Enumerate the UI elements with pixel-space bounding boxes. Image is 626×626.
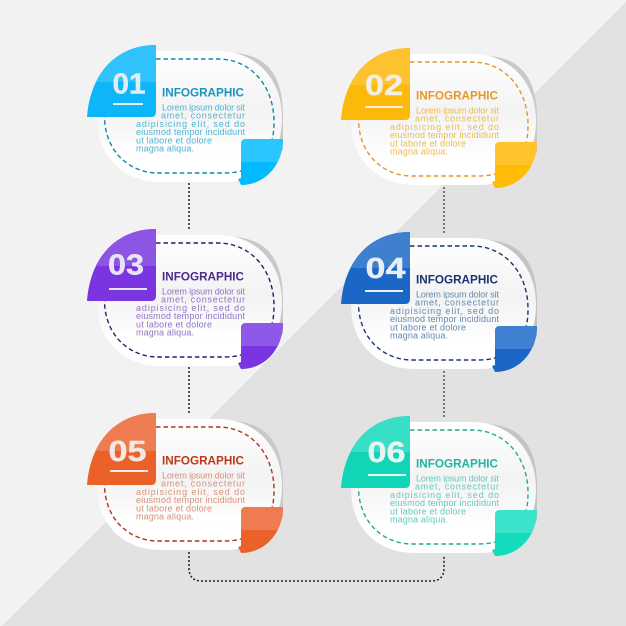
dashed outline bbox=[104, 243, 274, 357]
card 02 bbox=[339, 46, 539, 188]
body text: Lorem ipsum dolor sit bbox=[416, 106, 499, 116]
body text: amet, consectetur bbox=[415, 114, 499, 124]
number tab bbox=[85, 411, 158, 485]
body text: amet, consectetur bbox=[161, 295, 245, 305]
body text: ut labore et dolore bbox=[390, 138, 466, 148]
body text: magna aliqua. bbox=[136, 512, 194, 522]
card 05 bbox=[85, 411, 285, 553]
number tab bbox=[339, 46, 412, 120]
corner fold bbox=[238, 323, 283, 369]
body text bbox=[390, 474, 499, 524]
card 04 bbox=[339, 230, 539, 372]
body text: eiusmod tempor incididunt bbox=[136, 127, 245, 137]
card shadow bbox=[232, 53, 283, 150]
corner fold bbox=[238, 507, 283, 553]
body text: ut labore et dolore bbox=[390, 322, 466, 332]
body text: adipisicing elit, sed do bbox=[390, 490, 499, 500]
body text: Lorem ipsum dolor sit bbox=[162, 102, 245, 112]
corner fold bbox=[492, 510, 537, 556]
heading: INFOGRAPHIC bbox=[416, 274, 498, 286]
body text: adipisicing elit, sed do bbox=[136, 119, 245, 129]
card shadow bbox=[232, 421, 283, 518]
heading: INFOGRAPHIC bbox=[416, 458, 498, 470]
number tab bbox=[339, 230, 412, 304]
body text: adipisicing elit, sed do bbox=[136, 487, 245, 497]
body text: Lorem ipsum dolor sit bbox=[416, 474, 499, 484]
body text: eiusmod tempor incididunt bbox=[390, 314, 499, 324]
body text: amet, consectetur bbox=[415, 298, 499, 308]
body text: eiusmod tempor incididunt bbox=[390, 130, 499, 140]
corner fold bbox=[492, 326, 537, 372]
heading: INFOGRAPHIC bbox=[162, 88, 244, 100]
body text: magna aliqua. bbox=[390, 330, 448, 340]
card body bbox=[351, 422, 536, 553]
number: 05 bbox=[108, 436, 146, 468]
card 01 bbox=[85, 43, 285, 185]
number: 06 bbox=[368, 437, 406, 469]
card shadow bbox=[232, 237, 283, 334]
dashed outline bbox=[358, 430, 528, 544]
card body bbox=[97, 419, 282, 550]
body text: Lorem ipsum dolor sit bbox=[416, 290, 499, 300]
card shadow bbox=[486, 424, 537, 521]
body text: amet, consectetur bbox=[161, 479, 245, 489]
card shadow bbox=[486, 240, 537, 337]
card 06 bbox=[339, 414, 539, 556]
corner fold bbox=[492, 142, 537, 188]
heading: INFOGRAPHIC bbox=[162, 456, 244, 468]
body text: ut labore et dolore bbox=[390, 506, 466, 516]
card body bbox=[351, 238, 536, 369]
body text: ut labore et dolore bbox=[136, 320, 212, 330]
body text: eiusmod tempor incididunt bbox=[136, 311, 245, 321]
number tab bbox=[85, 43, 158, 117]
body text: ut labore et dolore bbox=[136, 504, 212, 514]
body text bbox=[136, 286, 245, 338]
corner fold bbox=[238, 139, 283, 185]
dashed outline bbox=[104, 59, 274, 173]
body text: magna aliqua. bbox=[390, 514, 448, 524]
body text: magna aliqua. bbox=[390, 146, 448, 156]
number tab bbox=[339, 414, 412, 488]
body text: adipisicing elit, sed do bbox=[136, 303, 245, 313]
body text: magna aliqua. bbox=[136, 328, 194, 338]
number: 04 bbox=[366, 253, 406, 285]
heading: INFOGRAPHIC bbox=[416, 90, 498, 102]
body text bbox=[390, 106, 499, 156]
body text bbox=[136, 102, 245, 154]
body text: adipisicing elit, sed do bbox=[390, 122, 499, 132]
body text: magna aliqua. bbox=[136, 144, 194, 154]
heading: INFOGRAPHIC bbox=[162, 272, 244, 284]
body text: Lorem ipsum dolor sit bbox=[162, 286, 245, 296]
number tab bbox=[85, 227, 158, 301]
number: 03 bbox=[108, 250, 144, 282]
number: 01 bbox=[112, 68, 146, 100]
card shadow bbox=[486, 56, 537, 153]
body text bbox=[136, 470, 245, 522]
body text: eiusmod tempor incididunt bbox=[390, 498, 499, 508]
card body bbox=[351, 54, 536, 185]
body text: eiusmod tempor incididunt bbox=[136, 495, 245, 505]
number: 02 bbox=[365, 70, 403, 102]
body text: amet, consectetur bbox=[161, 111, 245, 121]
body text: adipisicing elit, sed do bbox=[390, 306, 499, 316]
card 03 bbox=[85, 227, 285, 369]
connector lines bbox=[189, 183, 444, 581]
body text bbox=[390, 290, 499, 340]
card body bbox=[97, 235, 282, 366]
body text: Lorem ipsum dolor sit bbox=[162, 470, 245, 480]
body text: ut labore et dolore bbox=[136, 136, 212, 146]
dashed outline bbox=[358, 246, 528, 360]
dashed outline bbox=[358, 62, 528, 176]
body text: amet, consectetur bbox=[415, 482, 499, 492]
dashed outline bbox=[104, 427, 274, 541]
card body bbox=[97, 51, 282, 182]
